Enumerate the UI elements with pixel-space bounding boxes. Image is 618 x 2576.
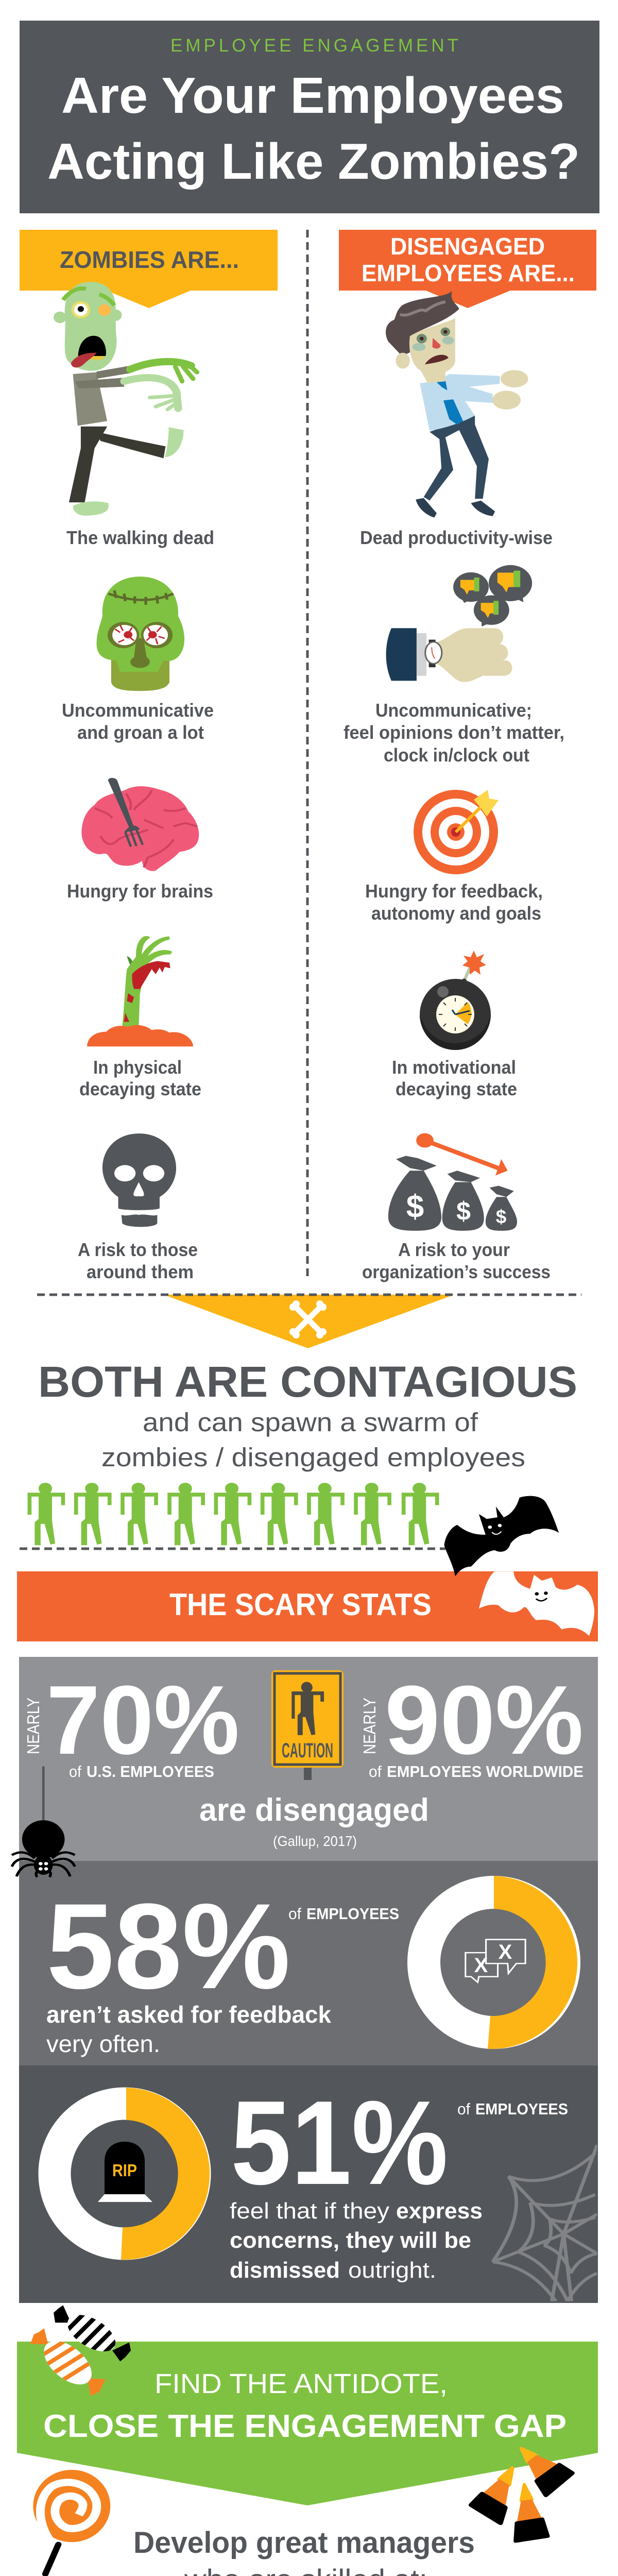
heading: develop great managers [133, 2526, 475, 2576]
banner: disengaged employees are: EMPLOYEES ARE... [362, 260, 575, 286]
panel: 58% [19, 1861, 598, 2065]
caption: uncommunicative, opinions, clock: feel opinions don’t matter, [344, 722, 564, 743]
caption: the walking dead: The walking dead [66, 527, 214, 548]
icon: money bags with falling arrow: $ [456, 1197, 471, 1226]
stat 70%: 70% [46, 1666, 239, 1775]
label employees worldwide: of [369, 1762, 382, 1781]
donut chart [55, 2088, 210, 2260]
caption: in physical decaying state: In physical [93, 1057, 182, 1078]
icon: watch hand with thumbs down [386, 565, 532, 682]
caption: uncommunicative and groan a lot: and groan a lot [77, 722, 204, 743]
icon: brain with fork [81, 778, 199, 871]
caption: hungry for feedback: Hungry for feedback, [365, 880, 543, 902]
arrow: yellow funnel with crossbones [37, 1295, 581, 1348]
nearly label right: NEARLY [360, 1698, 379, 1754]
label u.s. employees: U.S. EMPLOYEES [87, 1762, 214, 1781]
are disengaged: are disengaged [199, 1792, 429, 1828]
icon: speech x: X [474, 1954, 488, 1977]
of employees: of [457, 2100, 470, 2118]
icon: money bags with falling arrow: $ [406, 1189, 424, 1225]
description: outright. [348, 2258, 436, 2283]
icon: walking zombie [54, 282, 197, 516]
caption: hungry for brains: Hungry for brains [67, 880, 213, 902]
icon: lollipop [33, 2470, 110, 2574]
banner: zombies are [20, 230, 278, 308]
heading: both are contagious: BOTH ARE CONTAGIOUS [38, 1358, 577, 1406]
caption: uncommunicative, opinions, clock [344, 700, 564, 766]
description: very often. [46, 2030, 160, 2057]
banner: find the antidote [17, 2342, 598, 2505]
of employees: EMPLOYEES [306, 1905, 399, 1923]
description: express [396, 2198, 483, 2224]
stat 51%: 51% [231, 2076, 448, 2210]
icon: green skull [96, 577, 184, 691]
panel: 51% [19, 2065, 598, 2303]
source gallup: (Gallup, 2017) [273, 1833, 357, 1849]
caption: in physical decaying state: decaying state [79, 1078, 201, 1099]
icon: caution sign [271, 1670, 344, 1780]
caption: a risk to those around them: around them [87, 1261, 194, 1282]
icon row: swarm of green figures [28, 1483, 439, 1545]
caption: a risk to those around them: A risk to those [78, 1239, 198, 1260]
description [230, 2198, 483, 2283]
stat 58%: 58% [46, 1878, 290, 2014]
caption: in motivational decaying state [392, 1057, 517, 1099]
icon: black bat [444, 1496, 559, 1577]
icon: zombie hand from ground [87, 936, 193, 1046]
icon: white bat [479, 1571, 594, 1636]
icon: candy corn [471, 2448, 572, 2541]
description: dismissed [230, 2258, 340, 2283]
subheading: swarm: and can spawn a swarm of [143, 1408, 478, 1437]
subheading: swarm [101, 1408, 525, 1472]
icon: spider [12, 1766, 75, 1877]
banner: the scary stats: THE SCARY STATS [169, 1587, 432, 1622]
icon: speech x [466, 1940, 525, 1982]
caption: a risk to those around them [78, 1239, 198, 1282]
caption: hungry for feedback [365, 880, 543, 924]
caption: a risk to your organization's success: organization’s success [362, 1261, 551, 1282]
icon: speech x: X [499, 1941, 512, 1963]
stat 90%: 90% [385, 1666, 583, 1775]
decorative spider web [493, 2145, 597, 2301]
label employees worldwide: EMPLOYEES WORLDWIDE [387, 1762, 583, 1781]
icon: target with arrow [414, 790, 499, 874]
caption: dead productivity-wise: Dead productivity-wise [360, 527, 553, 548]
header panel [20, 21, 599, 213]
description: aren’t asked for feedback [46, 2001, 331, 2028]
description: feel that if they [230, 2198, 389, 2224]
vertical divider [306, 230, 309, 1281]
icon: clock bomb [420, 951, 491, 1050]
icon: caution sign: CAUTION [282, 1739, 333, 1762]
icon: tombstone [98, 2142, 152, 2202]
caption: a risk to your organization's success: A risk to your [398, 1239, 510, 1260]
panel: 70% and 90% [19, 1657, 598, 1861]
caption: uncommunicative, opinions, clock: Uncommunicative; [375, 700, 532, 721]
icon: money bags with falling arrow: $ [496, 1206, 507, 1227]
subheading: swarm: zombies / disengaged employees [101, 1443, 525, 1472]
banner: zombies are: ZOMBIES ARE... [60, 246, 239, 273]
icon: grey skull [102, 1133, 176, 1227]
kicker: EMPLOYEE ENGAGEMENT [170, 36, 458, 56]
caption: a risk to your organization's success [362, 1239, 551, 1282]
label u.s. employees: of [69, 1762, 81, 1781]
banner: disengaged employees are [339, 230, 596, 308]
donut chart [424, 1876, 577, 2049]
icon: wrapped candies [30, 2305, 131, 2396]
caption: in motivational decaying state: decaying state [396, 1078, 517, 1099]
caption: in physical decaying state [79, 1057, 201, 1099]
icon: money bags with falling arrow [388, 1133, 517, 1231]
caption: hungry for feedback: autonomy and goals [371, 903, 541, 924]
caption: uncommunicative and groan a lot [62, 700, 214, 743]
caption: in motivational decaying state: In motivational [392, 1057, 516, 1078]
nearly label left: NEARLY [24, 1698, 43, 1754]
banner: disengaged employees are: DISENGAGED [390, 233, 545, 260]
of employees: of [288, 1905, 301, 1923]
description [46, 2001, 331, 2057]
description: concerns, they will be [230, 2228, 471, 2253]
title line 1: Are Your Employees [61, 67, 564, 124]
banner: find the antidote: FIND THE ANTIDOTE, [154, 2368, 448, 2399]
icon: disengaged employee [386, 291, 528, 518]
banner: the scary stats [17, 1571, 598, 1641]
title line 2: Acting Like Zombies? [47, 133, 580, 190]
heading: develop great managers: Develop great managers [133, 2526, 475, 2560]
icon: tombstone: RIP [112, 2161, 137, 2180]
caption: uncommunicative, opinions, clock: clock in/clock out [384, 744, 529, 766]
of employees: EMPLOYEES [475, 2100, 568, 2118]
banner: find the antidote: CLOSE THE ENGAGEMENT GAP [43, 2409, 566, 2444]
caption: uncommunicative and groan a lot: Uncommunicative [62, 700, 214, 721]
